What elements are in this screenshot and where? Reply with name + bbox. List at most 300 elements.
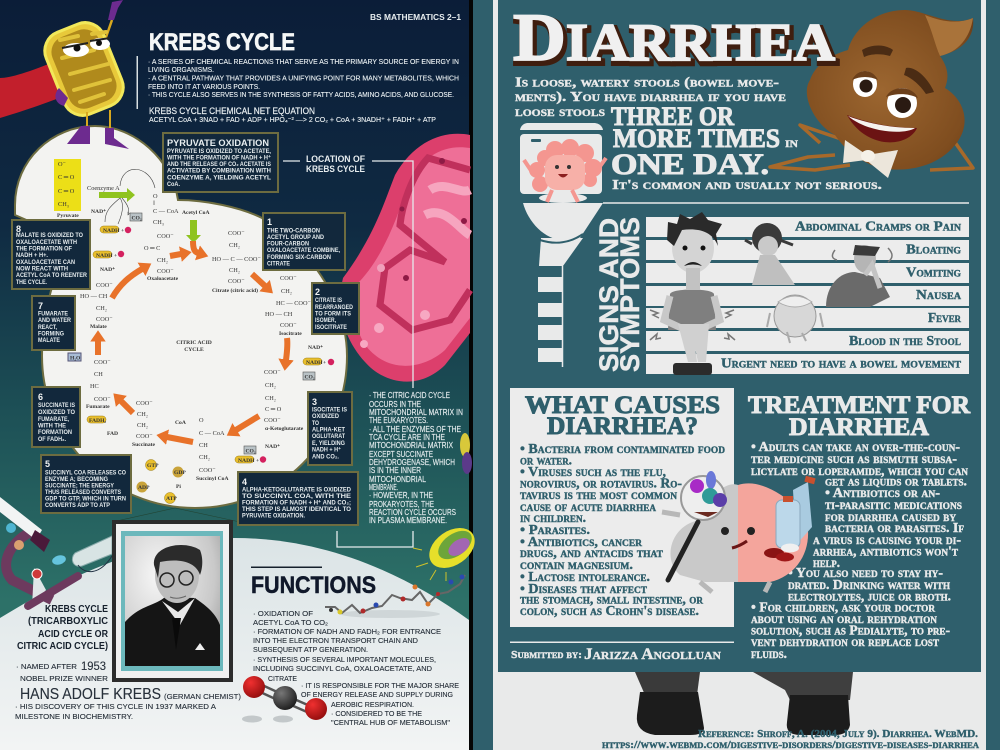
intermediates: CH₂ <box>199 454 210 461</box>
panel: step 2: 2 <box>315 287 320 297</box>
panel: what causes diarrhea <box>510 388 734 627</box>
text block: citric acid cycle location notes: MITOCHONDRIAL MATRIX <box>369 440 453 450</box>
panel: step 6: FORMATION <box>38 429 72 436</box>
panel: step 7: 7 <box>38 301 43 311</box>
cofactors: CO₂ <box>304 374 315 380</box>
panel: step 6: WITH THE <box>38 422 67 430</box>
acetyl CoA <box>153 193 210 243</box>
intermediates: Isocitrate <box>279 331 302 337</box>
heading: signs and symptoms: SYMPTOMS <box>615 217 645 372</box>
icon: ATP chain molecule <box>325 574 465 618</box>
acetyl CoA: C — CoA <box>153 208 179 215</box>
pyruvate: NADH <box>103 228 120 234</box>
pyruvate: O⁻ <box>58 161 66 168</box>
intermediates: CITRIC ACID <box>176 340 212 346</box>
intermediates: Succinate <box>132 442 156 448</box>
intermediates: CH₂ <box>96 305 107 312</box>
intermediates: COO⁻ <box>136 433 153 440</box>
text block: functions list: · OXIDATION OF <box>253 609 313 618</box>
intermediates: COO⁻ <box>96 316 113 323</box>
panel: what causes diarrhea: • Lactose intolerance. <box>520 569 650 584</box>
panel: step 4: FORMATION OF NADH + H⁺ AND CO₂; <box>242 500 351 506</box>
panel: what causes diarrhea: cause of acute diarrhea <box>520 499 657 514</box>
panel: what causes diarrhea: or water. <box>520 452 572 468</box>
panel: treatment for diarrhea: arrhea, antibiotics won't <box>813 544 958 558</box>
list: symptoms <box>646 217 969 374</box>
panel: step 2: REARRANGED <box>315 304 353 311</box>
text block: Krebs cycle alternative names: KREBS CYCLE <box>45 604 108 615</box>
text block: Krebs cycle alternative names: CITRIC ACID CYCLE) <box>17 641 108 652</box>
intermediates: Succinyl CoA <box>196 476 228 482</box>
panel: step 7: FORMING <box>38 330 64 338</box>
panel: treatment for diarrhea: vent dehydration or replace lost <box>751 634 939 649</box>
title: KREBS CYCLE <box>149 29 295 56</box>
intermediates: COO⁻ <box>280 275 297 282</box>
text block: reference <box>602 728 979 750</box>
panel: step 7: FUMARATE <box>38 310 68 318</box>
intermediates: COO⁻ <box>264 369 281 376</box>
text block: functions list: "CENTRAL HUB OF METABOLISM" <box>331 718 450 727</box>
panel: treatment for diarrhea: • Adults can take an over-the-coun- <box>751 439 960 454</box>
text block: citric acid cycle location notes: MEMBRANE. <box>369 482 398 492</box>
panel: step 4: ALPHA-KETOGLUTARATE IS OXIDIZED <box>242 486 351 494</box>
panel: treatment for diarrhea: licylate or loperamide, which you can <box>751 463 968 478</box>
list: symptoms: Bloating <box>906 242 961 256</box>
text block: Hans Krebs biography: 1953 <box>81 659 106 673</box>
panel: step 2: ISOMER, <box>315 317 336 324</box>
panel: step 1: OXALOACETATE COMBINE, <box>267 247 340 254</box>
panel: step 6: OXIDIZED TO <box>38 409 75 416</box>
illustration: man on toilet with cramps <box>650 212 735 375</box>
text block: citric acid cycle location notes: · ALL THE ENZYMES OF THE <box>369 424 461 434</box>
illustration: sick and healthy intestine with magnifier and medicine <box>662 471 816 592</box>
text block: definition: It's common and usually not serious. <box>612 177 882 192</box>
panel: treatment for diarrhea: ti-parasitic medications <box>825 497 962 512</box>
text block: definition: loose stools <box>515 104 605 119</box>
panel: what causes diarrhea: contain magnesium. <box>520 557 633 572</box>
intermediates: COO⁻ <box>94 396 111 403</box>
cofactors: + <box>256 458 259 464</box>
panel: step 3: OGLUTARAT <box>312 433 345 440</box>
intermediates: CH₂ <box>137 422 148 429</box>
text block: Krebs cycle alternative names <box>17 604 109 652</box>
text block: definition: in <box>785 135 799 150</box>
acetyl CoA: CH₃ <box>153 219 164 226</box>
text block: Krebs cycle intro: LIVING ORGANISMS. <box>148 67 214 74</box>
title: DIARRHEA <box>513 0 835 75</box>
panel: pyruvate oxidation: AND THE RELEASE OF CO₂ ACETATE IS <box>167 161 271 168</box>
panel: step 2 <box>312 283 359 334</box>
panel: what causes diarrhea: in children. <box>520 510 586 525</box>
text block: citric acid cycle location notes: THE EUKARYOTES. <box>369 415 428 425</box>
illustration: sick stomach <box>767 295 823 343</box>
panel: step 7 <box>32 296 75 350</box>
panel: step 8: NOW REACT WITH <box>16 266 68 272</box>
text block: citric acid cycle location notes: EXCEPT SUCCINATE <box>369 449 433 459</box>
text block: functions list: AEROBIC RESPIRATION. <box>331 700 414 709</box>
panel: step 8: THE CYCLE. <box>16 279 47 286</box>
cofactors: + <box>114 253 117 259</box>
panel: step 2: TO FORM ITS <box>315 310 352 318</box>
acetyl CoA: Acetyl CoA <box>182 210 210 216</box>
text block: Krebs cycle intro: · THIS CYCLE ALSO SERVES IN THE SYNTHESIS OF FATTY ACIDS, AMINO ACIDS, AND GLUCOSE. <box>148 92 454 99</box>
text block: citric acid cycle location notes: REACTION CYCLE OCCURS <box>369 507 456 517</box>
cofactors <box>68 251 334 504</box>
panel: pyruvate oxidation: WITH THE FORMATION OF NADH + H⁺ <box>167 154 271 162</box>
title: DIARRHEA <box>515 2 837 78</box>
label: class tag: BS MATHEMATICS 2–1 <box>370 12 461 22</box>
intermediates: COO⁻ <box>96 282 113 289</box>
text block: definition: ments). You have diarrhea if you have <box>515 89 786 104</box>
text block: reference: Reference: Shroff, A. (2004, July 9). Diarrhea. WebMD. <box>698 728 978 740</box>
illustration: nauseous man <box>826 245 892 307</box>
icon: microscope <box>0 497 78 607</box>
cofactors: GDP <box>174 470 186 476</box>
text block: functions list: INCLUDING SUCCINYL CoA, OXALOACETATE, AND <box>253 664 432 673</box>
panel: step 8: MALATE IS OXIDIZED TO <box>16 232 83 239</box>
panel: what causes diarrhea: tavirus is the most common <box>520 487 678 502</box>
heading: functions: FUNCTIONS <box>251 572 376 599</box>
panel: diarrhea poster <box>510 0 979 750</box>
intermediates: CH₂ <box>229 242 240 249</box>
cofactors: H₂O <box>70 356 81 362</box>
intermediates: HC <box>90 383 99 390</box>
pyruvate: NAD⁺ <box>91 208 106 215</box>
panel: treatment for diarrhea: ter medicine such as bismuth subsa- <box>751 451 957 466</box>
cofactors: NAD⁺ <box>265 443 280 450</box>
panel: step 3: E, YIELDING <box>312 440 345 447</box>
panel: step 1: CITRATE <box>267 260 290 268</box>
pyruvate: Pyruvate <box>57 213 79 219</box>
panel: step 6: OF FADH₂. <box>38 436 66 443</box>
pyruvate <box>54 159 155 234</box>
intermediates: HO — CH <box>265 311 293 318</box>
panel: what causes diarrhea: • Bacteria from contaminated food <box>520 441 726 456</box>
panel: what causes diarrhea: • Antibiotics, cancer <box>520 534 643 549</box>
panel: what causes diarrhea: • Viruses such as the flu, <box>520 464 666 479</box>
text block: net equation: ACETYL CoA + 3NAD + FAD + ADP + HPO₄⁻² —> 2 CO₂ + CoA + 3NADH⁺ + FADH⁺ + ATP <box>149 117 436 124</box>
text block: Hans Krebs biography: NOBEL PRIZE WINNER <box>20 674 109 683</box>
intermediates: HO — C — COO⁻ <box>212 256 261 263</box>
pyruvate: C ═ O <box>58 174 75 181</box>
panel: treatment for diarrhea: • For children, ask your doctor <box>751 600 936 614</box>
panel: step 7: REACT, <box>38 324 57 331</box>
cofactors: NAD⁺ <box>308 344 323 351</box>
intermediates: α-Ketoglutarate <box>265 426 304 432</box>
text block: definition: MORE TIMES <box>613 124 780 153</box>
panel: what causes diarrhea: WHAT CAUSES <box>525 392 720 419</box>
panel: treatment for diarrhea <box>748 392 971 661</box>
pyruvate: CH₃ <box>58 201 69 208</box>
intermediates: CH₂ <box>281 288 292 295</box>
intermediates: COO⁻ <box>199 467 216 474</box>
intermediates: Citrate (citric acid) <box>212 287 258 294</box>
panel: step 8: THE FORMATION OF <box>16 246 72 252</box>
panel: what causes diarrhea: drugs, and antacids that <box>520 545 663 560</box>
panel: step 5: CONVERTS ADP TO ATP <box>45 502 110 509</box>
pyruvate: + <box>121 228 124 234</box>
callout: location of Krebs cycle with leader lines <box>283 154 413 547</box>
illustration: girl with abdominal pain <box>745 223 795 285</box>
pyruvate: CO₂ <box>132 216 142 222</box>
cofactors: FAD <box>107 431 118 437</box>
panel: step 4: PYRUVATE OXIDATION. <box>242 512 305 520</box>
panel: step 6: FUMARATE, <box>38 416 69 423</box>
intermediates: COO⁻ <box>264 417 281 424</box>
list: symptoms: Vomiting <box>906 264 961 280</box>
text block: citric acid cycle location notes: IS IN THE INNER <box>369 465 421 475</box>
intermediates <box>80 230 311 482</box>
intermediates: COO⁻ <box>228 278 245 285</box>
icon: bacterium <box>413 433 482 581</box>
list: symptoms: Urgent need to have a bowel movement <box>721 356 961 370</box>
pyruvate: C ═ O <box>58 188 75 195</box>
text block: Krebs cycle intro: · A SERIES OF CHEMICAL REACTIONS THAT SERVE AS THE PRIMARY SOURCE OF ENERGY IN <box>148 59 459 66</box>
panel: step 1: 1 <box>267 217 272 227</box>
text block: citric acid cycle location notes: TCA CYCLE ARE IN THE <box>369 432 445 442</box>
panel: step 5: 5 <box>45 459 50 469</box>
intermediates: CH₂ <box>157 257 168 264</box>
light lower background curve <box>0 538 469 750</box>
intermediates: C ═ O <box>265 406 282 413</box>
intermediates: CH₂ <box>137 411 148 418</box>
text block: definition: ONE DAY. <box>611 148 769 181</box>
panel: step 3 <box>308 392 352 465</box>
heading: signs and symptoms <box>594 217 645 372</box>
intermediates: C — CoA <box>199 430 225 437</box>
cofactors: NADH <box>238 458 255 464</box>
intermediates: CH <box>94 371 103 378</box>
intermediates: COO⁻ <box>228 230 245 237</box>
text block: Hans Krebs biography: HANS ADOLF KREBS <box>20 686 161 703</box>
panel: step 3: OXIDIZED <box>312 413 339 420</box>
text block: definition: THREE OR <box>611 102 734 131</box>
panel: step 1: FORMING SIX-CARBON <box>267 254 331 261</box>
list: symptoms: Abdominal Cramps or Pain <box>795 218 962 234</box>
panel: treatment for diarrhea: bacteria or parasites. If <box>825 520 965 535</box>
panel: step 4: TO SUCCINYL COA, WITH THE <box>242 493 352 500</box>
text block: functions list: · SYNTHESIS OF SEVERAL IMPORTANT MOLECULES, <box>253 655 436 664</box>
panel: step 6: 6 <box>38 392 43 402</box>
panel: treatment for diarrhea: • You also need to stay hy- <box>788 565 943 580</box>
panel: step 5: SUCCINYL COA RELEASES CO <box>45 470 126 476</box>
panel: step 1 <box>263 213 345 270</box>
text block: Hans Krebs biography: · NAMED AFTER <box>16 662 78 671</box>
text block: functions list: ACETYL CoA TO CO₂ <box>253 618 328 627</box>
intermediates: Fumarate <box>86 404 110 410</box>
text block: citric acid cycle location notes: OCCURS IN THE <box>369 399 421 409</box>
panel: treatment for diarrhea: for diarrhea caused by <box>825 509 957 524</box>
cofactors: + <box>323 360 326 366</box>
text block: submitted by: Submitted by: <box>511 649 582 661</box>
icon: test tube <box>72 536 112 572</box>
illustration: legs and shoes <box>635 672 853 735</box>
intermediates: HC — COO⁻ <box>276 300 311 307</box>
panel: treatment for diarrhea: drated. Drinking water with <box>788 577 950 592</box>
panel: treatment for diarrhea: about using an oral rehydration <box>751 611 938 626</box>
text block: Hans Krebs biography <box>15 659 241 721</box>
panel: pyruvate oxidation: COENZYME A, YIELDING ACETYL <box>167 174 271 182</box>
intermediates: COO⁻ <box>157 268 174 275</box>
text block: citric acid cycle location notes <box>369 390 463 525</box>
icon: superhero mitochondrion mascot <box>0 0 129 149</box>
text block: submitted by <box>510 642 734 663</box>
panel: step 8 <box>12 220 90 289</box>
panel: step 2: CITRATE IS <box>315 297 342 304</box>
panel: treatment for diarrhea: DIARRHEA <box>789 414 929 441</box>
panel: what causes diarrhea: the stomach, small intestine, or <box>520 592 704 606</box>
intermediates: COO⁻ <box>280 322 297 329</box>
text block: functions list: · CONSIDERED TO BE THE <box>331 709 422 718</box>
panel: step 1: ACETYL GROUP AND <box>267 234 324 241</box>
acetyl CoA: O <box>153 193 158 200</box>
panel: step 4 <box>238 472 358 525</box>
text block: Hans Krebs biography: · HIS DISCOVERY OF THIS CYCLE IN 1937 MARKED A <box>15 702 217 711</box>
text block: submitted by: Jarizza Angolluan <box>584 646 721 663</box>
panel: treatment for diarrhea: TREATMENT FOR <box>748 392 971 419</box>
text block: functions list: OF ENERGY RELEASE AND SUPPLY DURING <box>301 690 453 699</box>
intermediates: CH <box>199 442 208 449</box>
panel: what causes diarrhea: norovirus, or rotavirus. Ro- <box>520 476 682 490</box>
panel: step 8: OXALOACETATE CAN <box>16 259 75 266</box>
cofactors: ATP <box>166 496 177 502</box>
text block: net equation <box>149 106 436 124</box>
orange cycle arrows <box>98 241 287 442</box>
panel: step 3: NADH + H⁺ <box>312 446 341 454</box>
panel: step 2: ISOCITRATE <box>315 324 347 331</box>
intermediates: COO⁻ <box>94 359 111 366</box>
cofactors: Pi <box>176 484 181 490</box>
text block: functions list <box>253 609 459 727</box>
panel: step 6: SUCCINATE IS <box>38 402 75 409</box>
panel: pyruvate oxidation: PYRUVATE OXIDATION <box>167 138 269 149</box>
panel: pyruvate oxidation <box>163 133 278 192</box>
panel: what causes diarrhea: DIARRHEA? <box>547 413 698 440</box>
panel: pyruvate oxidation: PYRUVATE IS OXIDIZED TO ACETATE, <box>167 148 271 155</box>
intermediates: COO⁻ <box>136 400 153 407</box>
text block: Hans Krebs biography: (GERMAN CHEMIST) <box>164 692 241 701</box>
panel: step 6 <box>32 387 80 447</box>
cofactors: CO₂ <box>246 448 256 454</box>
intermediates: HO — CH <box>80 293 108 300</box>
cofactors: GTP <box>147 463 159 469</box>
pink mitochondrion cross-section <box>340 134 470 382</box>
panel: step 8: 8 <box>16 224 21 234</box>
panel: step 1: THE TWO-CARBON <box>267 228 320 234</box>
heading: signs and symptoms: SIGNS AND <box>594 218 624 372</box>
panel: step 5: SUCCINATE; THE ENERGY <box>45 482 114 490</box>
panel: step 5 <box>41 455 131 513</box>
text block: citric acid cycle location notes: MITOCHONDRIAL <box>369 474 426 484</box>
panel: step 3: 3 <box>312 397 317 407</box>
text block: Krebs cycle alternative names: ACID CYCLE OR <box>38 629 109 640</box>
panel: step 3: TO <box>312 420 319 427</box>
panel: step 7: MALATE <box>38 337 60 344</box>
panel: step 5: THUS RELEASED CONVERTS <box>45 489 121 496</box>
intermediates: O ═ C <box>144 245 160 252</box>
text block: citric acid cycle location notes: IN PLASMA MEMBRANE. <box>369 515 447 525</box>
intermediates: CYCLE <box>184 347 204 353</box>
portrait: framed photo of Hans Krebs <box>112 520 233 682</box>
panel: treatment for diarrhea: solution, such as Pedialyte, to pre- <box>751 622 950 638</box>
callout: location of Krebs cycle with leader lines: LOCATION OF <box>306 154 366 164</box>
cofactors: NADH <box>306 360 323 366</box>
text block: citric acid cycle location notes: MITOCHONDRIAL MATRIX IN <box>369 407 463 417</box>
text block: functions list: INTO THE ELECTRON TRANSPORT CHAIN AND <box>253 636 418 645</box>
text block: definition: Is loose, watery stools (bowel move- <box>515 74 779 90</box>
intermediates: CH₂ <box>265 395 276 402</box>
panel: step 5: ENZYME A; BECOMING <box>45 476 108 483</box>
intermediates: CH₂ <box>265 382 276 389</box>
text block: Krebs cycle intro: FEED INTO IT AT VARIOUS POINTS. <box>148 84 260 91</box>
text block: net equation: KREBS CYCLE CHEMICAL NET EQUATION <box>149 106 315 116</box>
panel: Krebs cycle poster <box>0 0 482 750</box>
panel: treatment for diarrhea: help. <box>813 555 840 570</box>
panel: step 3: AND CO₂. <box>312 454 339 460</box>
panel: pyruvate oxidation: ACTIVATED BY COMBINATION WITH <box>167 168 271 174</box>
text block: functions list: · IT IS RESPONSIBLE FOR THE MAJOR SHARE <box>301 681 459 690</box>
panel: what causes diarrhea: colon, such as Crohn's disease. <box>520 603 699 618</box>
intermediates: COO⁻ <box>157 233 174 240</box>
panel: step 8: OXALOACETATE WITH <box>16 239 77 246</box>
list: symptoms: Fever <box>928 310 961 325</box>
panel: step 1: FOUR-CARBON <box>267 240 309 248</box>
panel: treatment for diarrhea: electrolytes, juice or broth. <box>788 588 951 604</box>
text block: definition <box>515 74 882 192</box>
pyruvate: Coenzyme A <box>87 185 120 192</box>
cofactors: FADH₂ <box>89 418 106 424</box>
text block: citric acid cycle location notes: · HOWEVER, IN THE <box>369 490 433 500</box>
callout: location of Krebs cycle with leader lines: KREBS CYCLE <box>306 164 365 174</box>
cofactors: ADP <box>138 485 150 491</box>
panel: pyruvate oxidation: CoA. <box>167 181 180 188</box>
text block: Krebs cycle intro <box>136 56 459 109</box>
diagram: citric acid cycle <box>15 126 347 522</box>
panel: treatment for diarrhea: • Antibiotics or an- <box>825 485 940 500</box>
intermediates: O <box>199 417 204 424</box>
cofactors: CoA <box>175 420 186 426</box>
panel: step 7: AND WATER <box>38 317 71 324</box>
text block: citric acid cycle location notes: PROKARYOTES, THE <box>369 499 434 509</box>
panel: step 3: ALPHA-KET <box>312 426 345 434</box>
text block: functions list: SUBSEQUENT ATP GENERATION. <box>253 645 368 654</box>
panel: step 8: ACETYL CoA TO REENTER <box>16 272 87 279</box>
cofactors: NAD⁺ <box>100 266 115 273</box>
intermediates: Oxaloacetate <box>147 276 179 282</box>
text block: functions list: CITRATE <box>268 674 297 683</box>
icon: toilet with happy intestine <box>520 123 969 367</box>
list: symptoms: Blood in the Stool <box>849 333 961 348</box>
panel: step 4: THIS STEP IS ALMOST IDENTICAL TO <box>242 506 351 513</box>
panel: step 5: GDP TO GTP, WHICH IN TURN <box>45 496 126 502</box>
panel: step 3: ISOCITATE IS <box>312 406 347 414</box>
icon: carbon dioxide molecule <box>242 676 327 722</box>
text block: citric acid cycle location notes: DEHYDROGENASE, WHICH <box>369 457 455 467</box>
icon: poop mascot <box>770 10 973 178</box>
panel: treatment for diarrhea: get as liquids or tablets. <box>825 474 967 488</box>
panel: what causes diarrhea: • Diseases that affect <box>520 581 647 596</box>
panel: treatment for diarrhea: fluids. <box>751 646 787 661</box>
panel: step 4: 4 <box>242 477 247 487</box>
text block: Krebs cycle intro: · A CENTRAL PATHWAY THAT PROVIDES A UNIFYING POINT FOR MANY METABOLITES, WHICH <box>148 76 459 82</box>
acetyl CoA: ‖ <box>153 200 155 207</box>
panel: treatment for diarrhea: a virus is causing your di- <box>813 532 961 547</box>
text block: Hans Krebs biography: MILESTONE IN BIOCHEMISTRY. <box>15 712 133 721</box>
panel: what causes diarrhea: • Parasites. <box>520 522 590 537</box>
text block: citric acid cycle location notes: · THE CITRIC ACID CYCLE <box>369 390 450 400</box>
intermediates: CH₂ <box>229 267 240 274</box>
intermediates: Malate <box>90 324 107 330</box>
